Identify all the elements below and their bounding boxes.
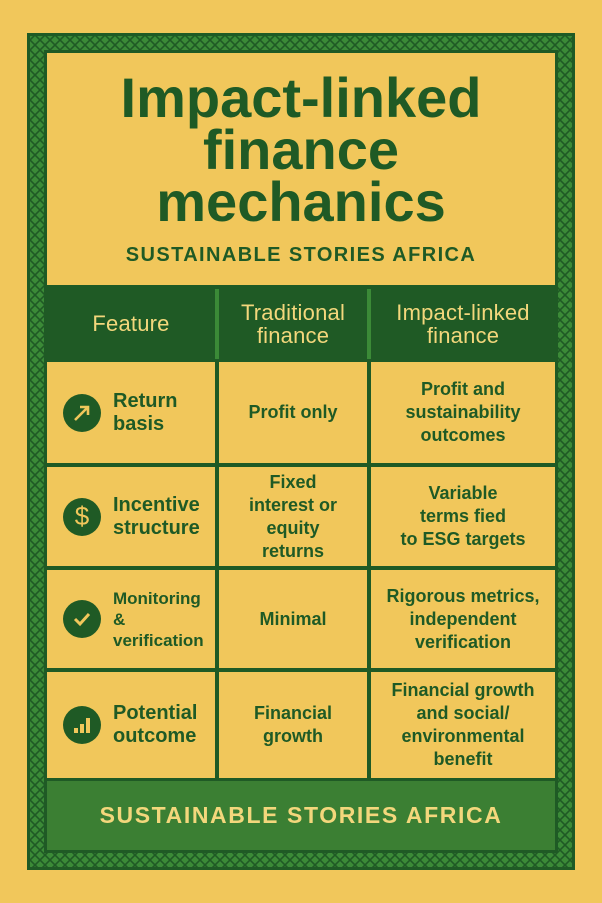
row 3: Monitoring & verification: Monitoring bbox=[113, 588, 201, 608]
row 3: Monitoring & verification bbox=[63, 588, 204, 650]
header: Traditional finance: finance bbox=[257, 322, 329, 348]
table: Financial growth bbox=[391, 680, 534, 700]
table: benefit bbox=[433, 749, 492, 769]
table: returns bbox=[262, 540, 324, 560]
header: Feature: Feature bbox=[92, 311, 170, 336]
header: Impact-linked finance: finance bbox=[427, 322, 499, 348]
table: Profit only bbox=[248, 402, 338, 422]
table: Financial bbox=[254, 703, 332, 723]
row 2: Incentive structure: Incentive bbox=[113, 494, 200, 516]
row 2: Incentive structure: $ bbox=[75, 501, 89, 531]
table: to ESG targets bbox=[400, 529, 526, 549]
table: interest or bbox=[249, 494, 337, 514]
table: outcomes bbox=[420, 425, 506, 445]
table: Fixed bbox=[269, 472, 316, 492]
table: environmental bbox=[401, 726, 524, 746]
row 2: Incentive structure bbox=[63, 494, 200, 538]
row 3: Monitoring & verification: verification bbox=[113, 630, 204, 650]
table: Profit and bbox=[421, 379, 505, 399]
table: verification bbox=[415, 632, 511, 652]
header: Impact-linked finance bbox=[396, 300, 530, 348]
header: Traditional finance: Traditional bbox=[241, 300, 345, 324]
table: independent bbox=[409, 608, 516, 628]
header: Traditional finance bbox=[241, 300, 345, 348]
table: and social/ bbox=[416, 703, 510, 723]
row 4: Potential outcome: Potential bbox=[113, 702, 197, 724]
table: terms fied bbox=[420, 506, 506, 526]
table: growth bbox=[263, 726, 323, 746]
footer banner bbox=[47, 781, 555, 850]
row 4: Potential outcome bbox=[63, 702, 197, 747]
subtitle: SUSTAINABLE STORIES AFRICA bbox=[126, 244, 476, 266]
header: Impact-linked finance: Impact-linked bbox=[396, 300, 530, 324]
row 2: Incentive structure: structure bbox=[113, 516, 200, 538]
row 3: Monitoring & verification: & bbox=[113, 610, 125, 628]
footer banner: SUSTAINABLE STORIES AFRICA bbox=[100, 802, 502, 828]
table bbox=[47, 285, 555, 781]
title bbox=[121, 66, 481, 233]
row 4: Potential outcome: outcome bbox=[113, 725, 196, 747]
table: Minimal bbox=[259, 608, 326, 628]
table: Variable bbox=[428, 483, 498, 503]
title: Impact-linked bbox=[121, 66, 481, 129]
row 1: Return basis bbox=[63, 390, 177, 434]
title: mechanics bbox=[156, 170, 446, 233]
row 1: Return basis: basis bbox=[113, 412, 164, 434]
table: equity bbox=[266, 518, 320, 538]
table: sustainability bbox=[405, 402, 521, 422]
table: Rigorous metrics, bbox=[386, 586, 540, 606]
row 1: Return basis: Return bbox=[113, 390, 177, 412]
grid lines bbox=[47, 285, 555, 781]
title: finance bbox=[203, 118, 399, 181]
